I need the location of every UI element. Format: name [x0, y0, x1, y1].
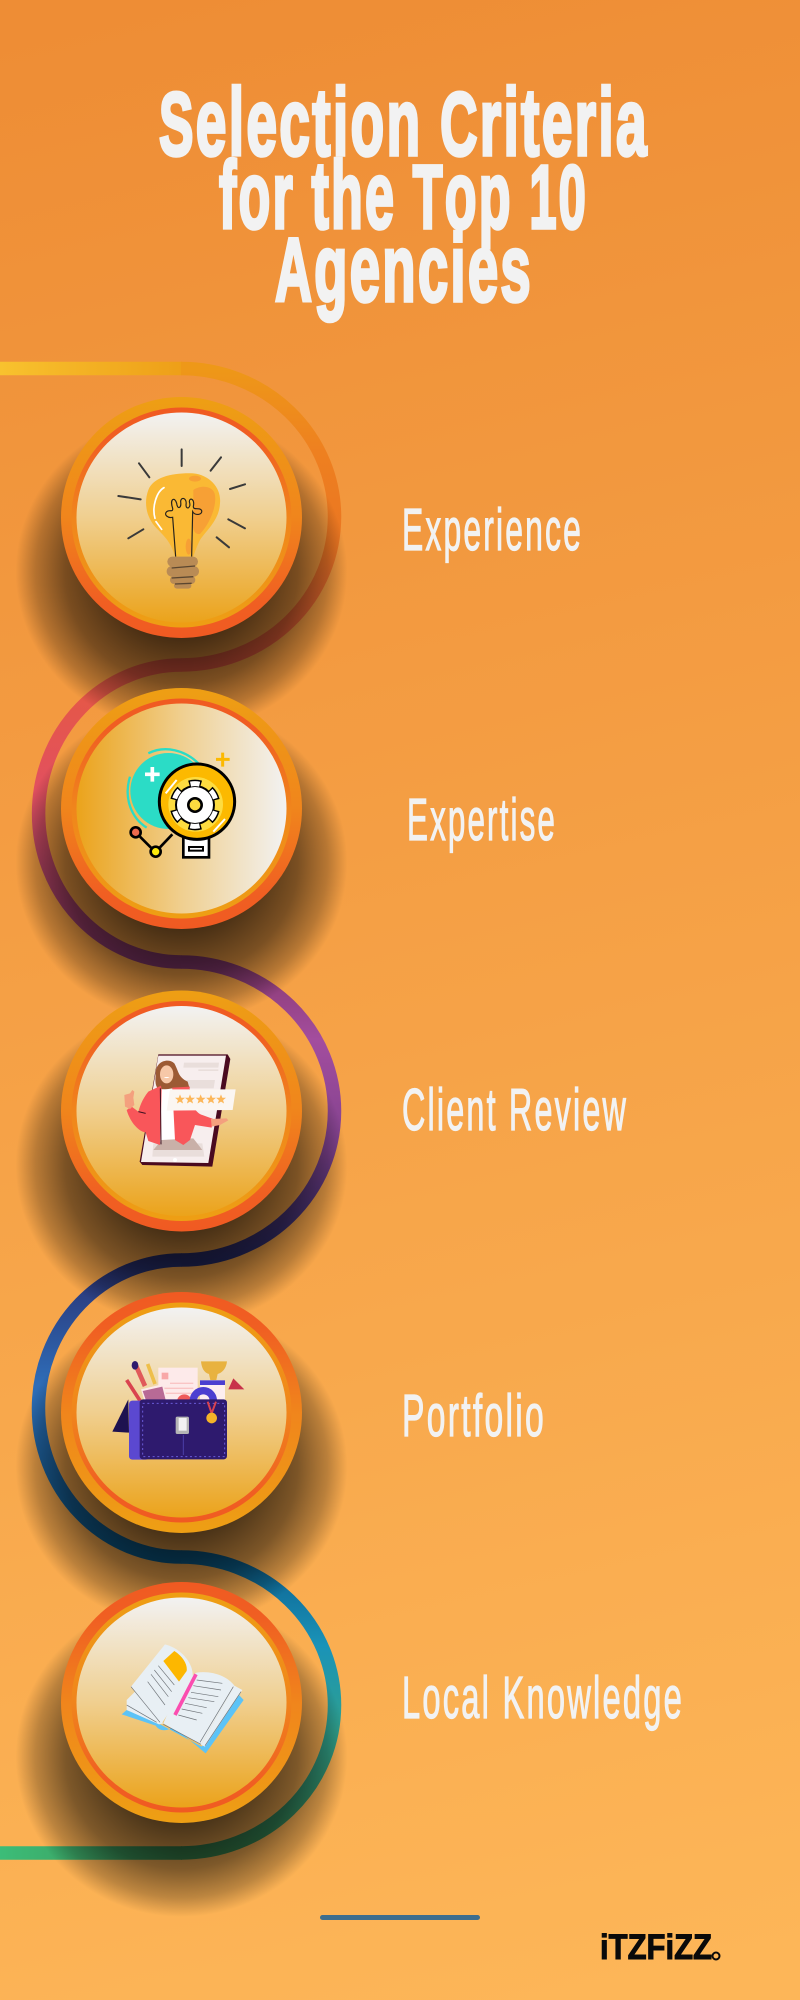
icon: portfolio bag	[112, 1361, 244, 1460]
icon: light bulb	[118, 449, 245, 589]
label: portfolio: Portfolio	[402, 1383, 546, 1449]
title: for the Top 10	[219, 142, 588, 249]
rating card	[167, 1089, 236, 1111]
panel: expertise circle	[61, 688, 302, 929]
title: Agencies	[275, 215, 533, 322]
panel: portfolio circle	[61, 1292, 302, 1533]
panel: experience circle	[61, 397, 302, 638]
icon: person in phone with rating	[124, 1054, 236, 1167]
icon: gear light bulb	[128, 749, 235, 857]
title: Selection Criteria	[159, 69, 649, 176]
winding path	[0, 368, 334, 1853]
icon: open book	[122, 1644, 244, 1753]
title	[159, 69, 649, 322]
label: experience: Experience	[402, 497, 583, 563]
panel: client review circle	[61, 990, 302, 1232]
circle shadows	[16, 412, 348, 1917]
logo: itzfizz: iTZFiZZ	[600, 1928, 712, 1967]
label: expertise: Expertise	[407, 787, 557, 853]
footer bar	[320, 1915, 480, 1920]
panel: local knowledge circle	[61, 1582, 302, 1823]
